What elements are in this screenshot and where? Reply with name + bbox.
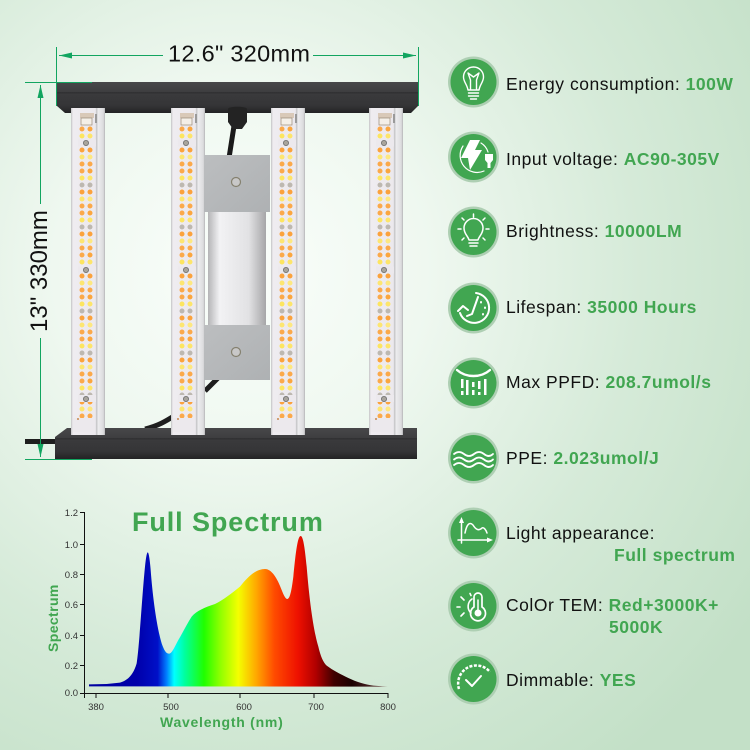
x tick labels: 700 <box>308 702 324 713</box>
y tick labels: 0.0 <box>65 688 78 699</box>
x axis label: Wavelength (nm) <box>160 714 284 730</box>
y tick labels: 0.2 <box>65 661 78 672</box>
driver top plate <box>204 155 270 212</box>
label: Brightness: 10000LM <box>506 221 682 241</box>
spectrum curve <box>89 536 388 687</box>
driver cable <box>229 126 234 158</box>
cable gland <box>228 107 247 129</box>
spec: energy consumption <box>448 56 733 108</box>
axes <box>80 512 388 698</box>
spec: PPE <box>448 432 659 484</box>
LED bar 1 <box>71 108 105 435</box>
value: 5000K <box>609 617 663 637</box>
x tick labels: 800 <box>380 702 396 713</box>
driver bottom plate <box>204 325 270 380</box>
spec: lifespan <box>448 282 697 334</box>
height dimension: 13" 330mm <box>26 210 53 332</box>
icon: sun and thermometer <box>448 580 499 632</box>
x tick labels: 600 <box>236 702 252 713</box>
bottom frame <box>55 428 417 459</box>
icon: clock with arrow <box>448 282 499 334</box>
x tick labels: 500 <box>163 702 179 713</box>
icon: dial with check <box>448 654 499 704</box>
width dimension: 12.6" 320mm <box>168 40 310 66</box>
LED bar 4 <box>369 108 403 435</box>
y tick labels <box>65 508 78 699</box>
spec: dimmable <box>448 654 636 704</box>
label: Max PPFD: 208.7umol/s <box>506 372 711 392</box>
spec: color temperature <box>448 580 719 637</box>
icon: power bolt and plug <box>448 132 499 182</box>
LED bar 2 <box>171 108 205 435</box>
spec: input voltage <box>448 132 720 182</box>
y tick labels: 0.4 <box>65 631 78 642</box>
label: PPE: 2.023umol/J <box>506 448 659 468</box>
value: Full spectrum <box>614 545 736 565</box>
LED bar 3 <box>271 108 305 435</box>
height dimension <box>25 82 92 460</box>
icon: spectrum chart <box>448 508 499 558</box>
driver body <box>208 212 266 325</box>
top frame <box>57 82 418 113</box>
y tick labels: 1.0 <box>65 540 78 551</box>
spec: brightness <box>448 206 682 258</box>
y tick labels: 1.2 <box>65 508 78 519</box>
icon: light rain from arc <box>448 358 499 408</box>
label: Light appearance: <box>506 523 655 543</box>
x tick labels: 380 <box>88 702 104 713</box>
width dimension <box>56 40 418 106</box>
x tick labels <box>88 702 396 713</box>
spec: light appearance <box>448 508 736 565</box>
spectrum chart <box>45 507 396 730</box>
y tick labels: 0.6 <box>65 600 78 611</box>
power cord <box>25 372 224 442</box>
product photo: LED grow light <box>25 82 418 459</box>
label: Lifespan: 35000 Hours <box>506 297 697 317</box>
icon: waves <box>448 432 499 484</box>
spec: max PPFD <box>448 358 711 408</box>
icon: light bulb <box>448 56 499 108</box>
y tick labels: 0.8 <box>65 570 78 581</box>
label: Input voltage: AC90-305V <box>506 149 720 169</box>
chart title: Full Spectrum <box>132 507 324 537</box>
y axis label: Spectrum <box>45 584 61 652</box>
icon: glowing bulb <box>448 206 499 258</box>
label: ColOr TEM: Red+3000K+ <box>506 595 719 615</box>
label: Energy consumption: 100W <box>506 74 733 94</box>
label: Dimmable: YES <box>506 670 636 690</box>
